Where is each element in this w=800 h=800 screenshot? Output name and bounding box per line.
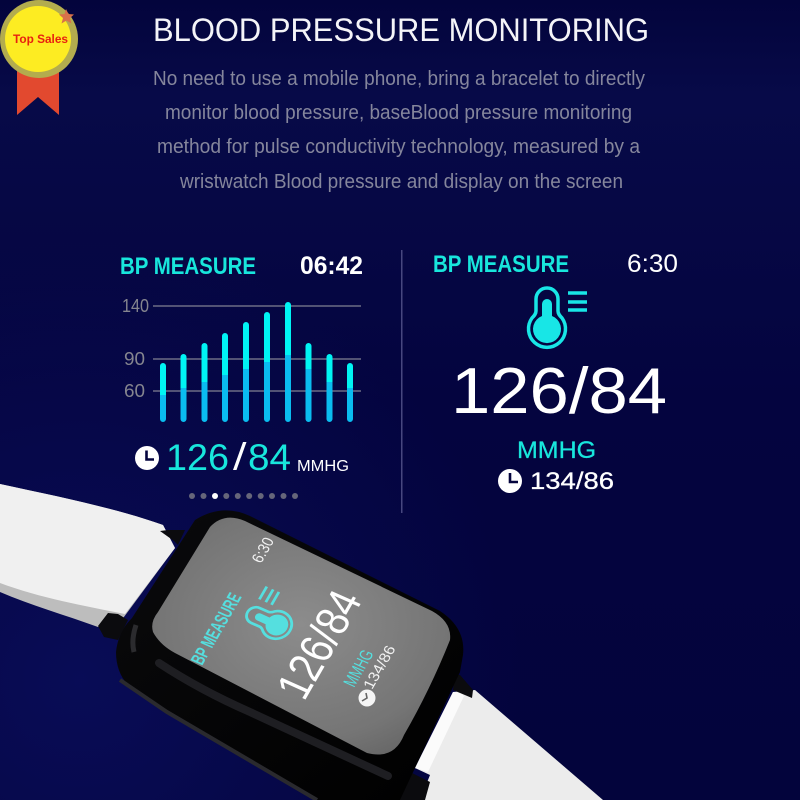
screen: heading: BP MEASURE <box>187 590 247 668</box>
pagination dots <box>189 493 298 499</box>
previous reading: 134/86 <box>530 468 614 495</box>
reading 126/84: 126 <box>166 437 229 478</box>
left heading: BP MEASURE <box>120 253 256 280</box>
watch screen <box>152 518 450 755</box>
bar chart: 60 <box>124 380 145 401</box>
reading 126/84 <box>166 437 291 478</box>
description text: monitor blood pressure, baseBlood pressure monitoring <box>165 101 632 124</box>
watch case <box>116 510 463 800</box>
badge: top sales: Top Sales <box>13 34 68 46</box>
screen: time: 6:30 <box>249 535 278 566</box>
right strap <box>415 690 603 800</box>
case highlights <box>159 663 388 776</box>
right time: 6:30 <box>627 250 678 278</box>
unit label: MMHG <box>517 437 596 464</box>
description text: wristwatch Blood pressure and display on the screen <box>179 170 623 193</box>
watch photo <box>0 484 603 800</box>
icon: thermometer <box>528 288 587 347</box>
panel: BP chart screen <box>120 252 363 499</box>
unit: MMHG <box>297 458 349 475</box>
strap lugs <box>98 530 473 800</box>
main reading: 126/84 <box>451 354 667 427</box>
title: BLOOD PRESSURE MONITORING <box>153 12 649 48</box>
description text: method for pulse conductivity technology, measured by a <box>157 135 641 158</box>
bar chart: 140 <box>122 295 149 316</box>
screen: unit: MMHG <box>339 647 378 690</box>
badge: top sales <box>0 0 78 115</box>
description text: No need to use a mobile phone, bring a bracelet to directly <box>153 67 646 90</box>
description text <box>153 67 646 193</box>
left time: 06:42 <box>300 252 363 280</box>
icon: clock <box>135 446 159 470</box>
screen: thermometer <box>240 585 305 643</box>
screen: reading: 126/84 <box>266 583 372 706</box>
divider <box>401 250 402 513</box>
reading 126/84: 84 <box>248 437 291 478</box>
icon: clock <box>498 469 522 493</box>
bar chart <box>122 295 361 419</box>
screen: clock <box>358 690 376 706</box>
bar chart: 90 <box>124 348 145 369</box>
screen: previous reading: 134/86 <box>360 643 400 692</box>
panel: BP reading screen <box>433 250 678 495</box>
left strap <box>0 484 175 627</box>
right heading: BP MEASURE <box>433 251 569 278</box>
